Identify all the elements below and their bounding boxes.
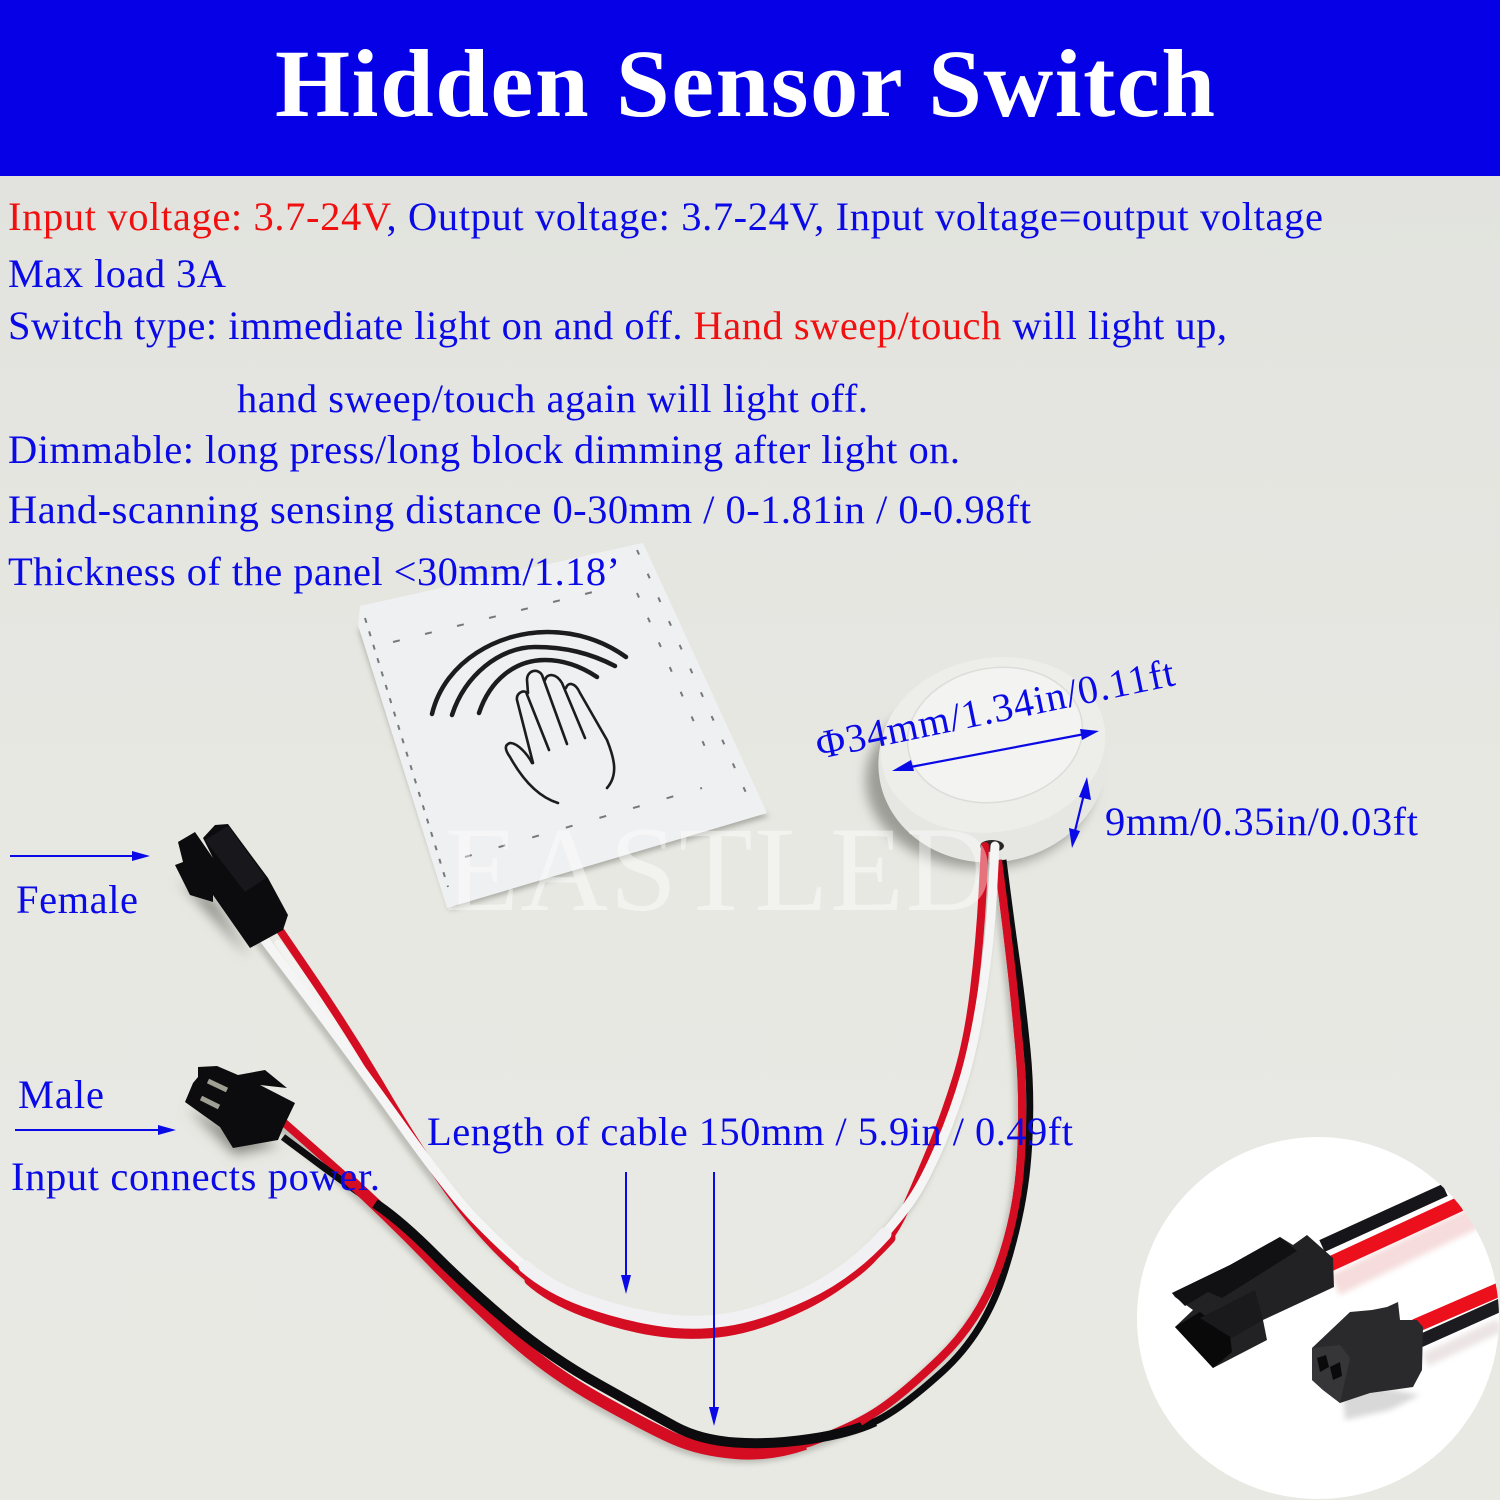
- specification text block: hand sweep/touch again will light off.: [237, 376, 868, 421]
- dimension label: thickness: 9mm/0.35in/0.03ft: [1105, 799, 1419, 844]
- sensor puck: [862, 640, 1124, 880]
- label: cable length with arrows: [427, 1109, 1074, 1426]
- male connector: [185, 1066, 295, 1155]
- inset reflections: [1335, 1215, 1500, 1360]
- icon: hand: [506, 671, 614, 803]
- specification text block: Switch type: immediate light on and off. Hand sweep/touch will light up,: [8, 303, 1227, 348]
- label: female: Female: [16, 877, 138, 922]
- dimension label: diameter: Φ34mm/1.34in/0.11ft: [812, 650, 1178, 768]
- label: female: [10, 851, 150, 922]
- label: cable length with arrows: Length of cable 150mm / 5.9in / 0.49ft: [427, 1109, 1074, 1154]
- icon: sweep arcs: [432, 632, 626, 715]
- specification text block: Dimmable: long press/long block dimming after light on.: [8, 427, 960, 472]
- specification text block: Hand-scanning sensing distance 0-30mm / 0-1.81in / 0-0.98ft: [8, 487, 1032, 532]
- dimension label: thickness: [1069, 777, 1419, 848]
- specification text block: Thickness of the panel <30mm/1.18’: [8, 549, 620, 594]
- specification text block: [8, 194, 1323, 594]
- title banner: Hidden Sensor Switch: [275, 30, 1215, 137]
- wire harness: red and black pair: [273, 860, 1030, 1454]
- inset circle: connector close-up: [1137, 1137, 1500, 1499]
- watermark: EASTLED: [445, 803, 993, 937]
- label: male: Input connects power.: [11, 1154, 380, 1199]
- inset wires: [1322, 1190, 1500, 1341]
- title banner: [0, 0, 1500, 176]
- female connector: [175, 824, 288, 958]
- inset small connector: [1342, 1389, 1418, 1421]
- label: male: [11, 1072, 380, 1199]
- wire harness: white and red pair: [257, 846, 995, 1333]
- wire shadows: [254, 851, 1019, 1459]
- specification text block: Max load 3A: [8, 251, 226, 296]
- label: male: Male: [18, 1072, 104, 1117]
- specification text block: Input voltage: 3.7-24V, Output voltage: 3.7-24V, Input voltage=output voltage: [8, 194, 1323, 239]
- sticker sheet with hand icon: [358, 543, 770, 910]
- inset large connector: [1172, 1235, 1334, 1368]
